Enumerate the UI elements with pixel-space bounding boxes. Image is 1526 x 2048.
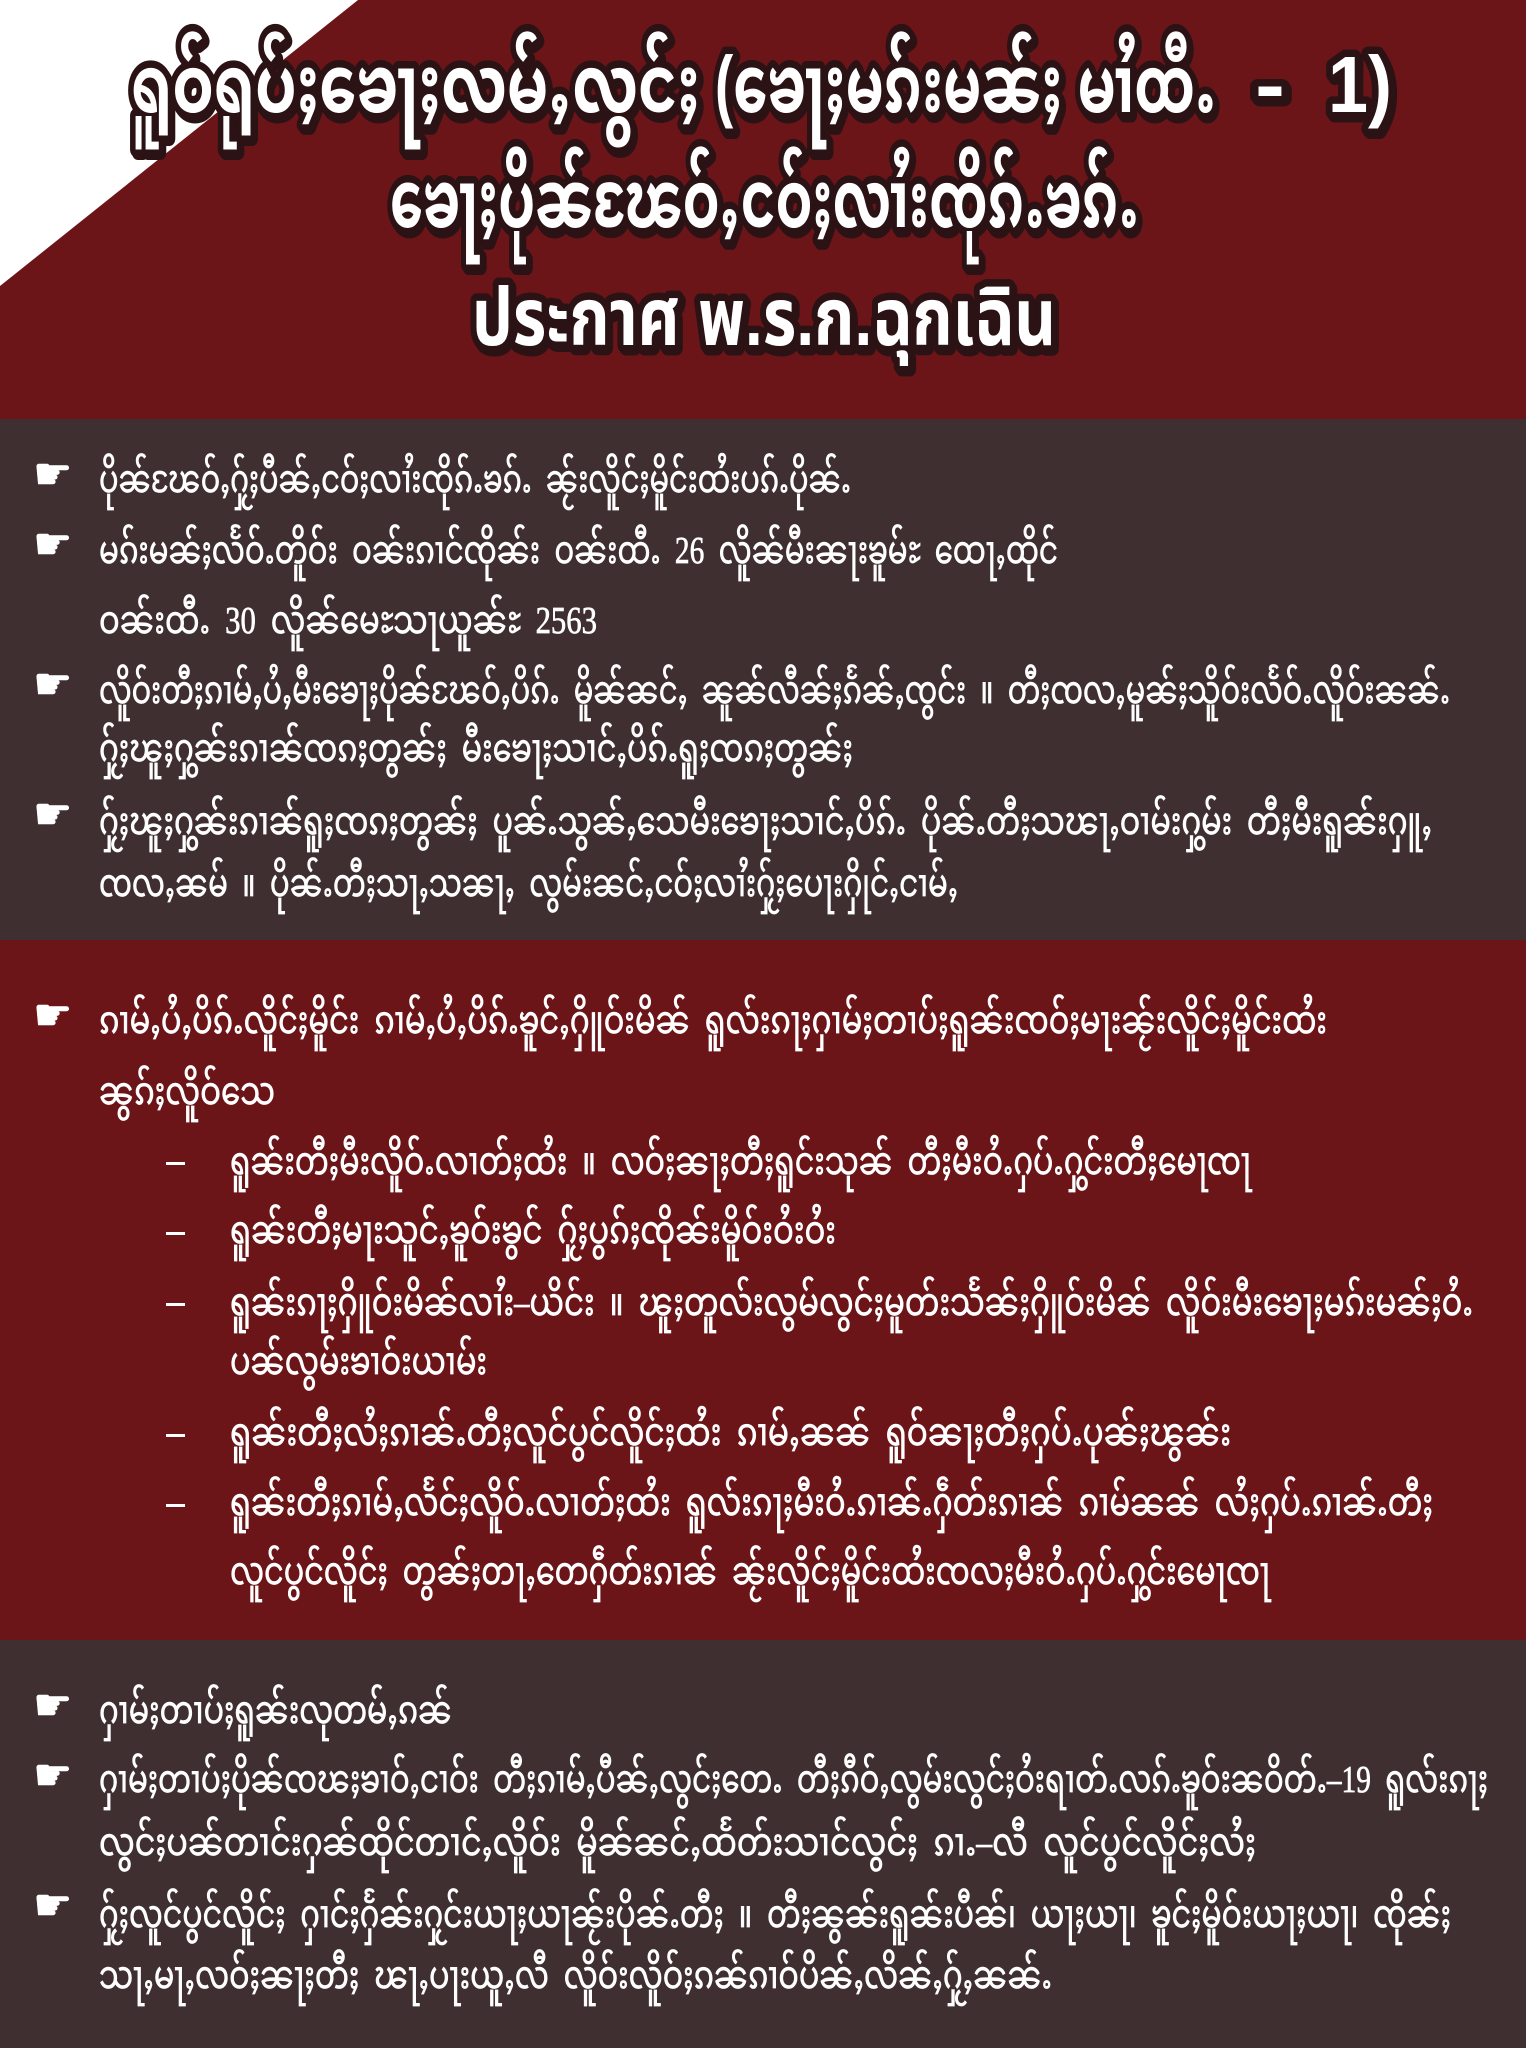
exemption 2 <box>166 1204 836 1261</box>
bullet: misinformation about COVID-19 <box>33 1750 1488 1873</box>
bullet: officials' instructions: ☛ <box>33 1880 72 1931</box>
bullet: air travel measures: ☛ <box>33 990 72 1041</box>
exemption 2: ရူၼ်းတီႈမႃးသူင်ႇၶူဝ်းၶွင် ႁႂ်ႈပွၵ်ႈၸိုၼ်းမိူဝ်းဝႆးဝႆး <box>230 1204 836 1261</box>
panel: lower information section <box>0 1640 1526 2048</box>
bullet: explanation of measures: ပိုၼ်ၽႄဝ်ႇႁႂ်ႈပီၼ်ႇငဝ်ႈလၢႆးၸိုၵ်ႉၶၵ်ႉ ၼႂ်းလိူင်ႈမိူင်းထႆးပၵ်ႉပိုၼ်ႉ <box>99 453 851 510</box>
bullet: avoid gatherings: ☛ <box>33 1680 72 1731</box>
bullet: misinformation about COVID-19: ☛ <box>33 1750 72 1801</box>
bullet: public places: ၸလႇၼမ် ။ ပိုၼ်ႉတီႈသႃႇသၼႃႇ လွမ်းၼင်ႇငဝ်ႈလၢႆးႁႂ်ႈပေႃးႁိုင်ႇငၢမ်ႇ <box>99 857 958 914</box>
panel: title header <box>0 0 1526 419</box>
bullet: prohibited entry areas: ☛ <box>33 659 72 710</box>
bullet: explanation of measures: ☛ <box>33 449 72 500</box>
panel: flight and entry restrictions section <box>0 940 1526 1640</box>
bullet: air travel measures <box>33 990 1327 1122</box>
exemption 5: လူင်ပွင်လိူင်ႈ တွၼ်ႈတႃႇတေႁဵတ်းၵၢၼ် ၼႂ်းလိူင်ႈမိူင်းထႆးၸလႈမီးဝႆႉႁပ်ႉႁွင်းမေႃၸႃ <box>230 1545 1272 1602</box>
bullet: effective dates <box>33 519 1058 651</box>
title line 1: 1) <box>1328 40 1392 129</box>
bullet: prohibited entry areas <box>33 659 1450 779</box>
title line 2: ၶေႃႈပိုၼ်ၽႄဝ်ႇငဝ်ႈလၢႆးၸိုၵ်ႉၶၵ်ႉ <box>390 145 1139 265</box>
bullet: effective dates: ဝၼ်းထီႉ 30 လိူၼ်မေႊသႃယူၼ်ႊ 2563 <box>99 594 597 651</box>
bullet: explanation of measures <box>33 449 851 510</box>
bullet: avoid gatherings: ႁၢမ်ႈတၢပ်ႈရူၼ်းလုတမ်ႇၵၼ် <box>99 1684 452 1741</box>
bullet: effective dates: မၵ်းမၼ်ႈလႅဝ်ႉတိူဝ်း ဝၼ်းၵၢင်ၸိုၼ်း ဝၼ်းထီႉ 26 လိူၼ်မီးၼႃးၶူမ်ႊ ထေႃႇထိုင် <box>99 524 1058 581</box>
exemption 4: ရူၼ်းတီႈလႆႈၵၢၼ်ႉတီႈလူင်ပွင်လိူင်ႈထႆး ၵၢမ်ႇၼၼ် ရူဝ်ၼႃႈတီႈႁပ်ႉပုၼ်ႈၽွၼ်း <box>230 1406 1231 1463</box>
bullet: public places <box>33 789 1432 914</box>
exemption 3: ပၼ်လွမ်းၶၢဝ်းယၢမ်း <box>230 1335 487 1390</box>
bullet: officials' instructions: သႃႇမႃႇလဝ်ႈၼႃႈတီႈ ၽႃႇပႃးယူႇလီ လိူဝ်းလိူဝ်ႈၵၼ်ၵၢဝ်ပိၼ်ႇလိၼ်ႇႁႂ်ႇၼၼ်ႉ <box>99 1949 1052 2006</box>
bullet: public places: ☛ <box>33 789 72 840</box>
title line 3: ประกาศ พ.ร.ก.ฉุกเฉิน <box>472 273 1056 366</box>
title line 1: ရူဝ်ရုပ်ႈၶေႃႈလမ်ႇလွင်ႈ <box>131 30 700 150</box>
title line 1: (ၶေႃႈမၵ်းမၼ်ႈ မၢႆထီႉ <box>715 30 1216 150</box>
title line 1: - <box>1255 40 1285 129</box>
bullet: prohibited entry areas: ႁႂ်ႈၽူႈႁွၼ်းၵၢၼ်ၸၵႈတွၼ်ႈ မီးၶေႃႈသၢင်ႇပိၵ်ႉရူႈၸၵႈတွၼ်ႈ <box>99 722 853 779</box>
exemption 4 <box>166 1406 1231 1463</box>
exemption 5 <box>166 1476 1433 1602</box>
bullet: effective dates: ☛ <box>33 519 72 570</box>
panel: upper information section <box>0 419 1526 940</box>
bullet: avoid gatherings <box>33 1680 452 1741</box>
exemption 3 <box>166 1276 1473 1390</box>
title line 1 <box>131 30 1392 150</box>
exemption 1 <box>166 1135 1253 1192</box>
exemption 1: ရူၼ်းတီႈမီးလိူဝ်ႉလၢတ်ႈထႆး ။ လဝ်ႈၼႃႈတီႈရူင်းသုၼ် တီႈမီးဝႆႉႁပ်ႉႁွင်းတီႈမေႃၸႃ <box>230 1135 1253 1192</box>
bullet: misinformation about COVID-19: လွင်ႈပၼ်တၢင်းႁၼ်ထိုင်တၢင်ႇလိူဝ်း မိူၼ်ၼင်ႇထႅတ်းသၢင်လွင်ႈ ၵၢႉ–လီ လူင်ပွင်လိူင်ႈလႆႈ <box>99 1816 1256 1873</box>
bullet: air travel measures: ၼွၵ်ႈလိူဝ်သေ <box>99 1065 275 1122</box>
bullet: officials' instructions <box>33 1880 1451 2006</box>
exemption list <box>166 1135 1473 1602</box>
